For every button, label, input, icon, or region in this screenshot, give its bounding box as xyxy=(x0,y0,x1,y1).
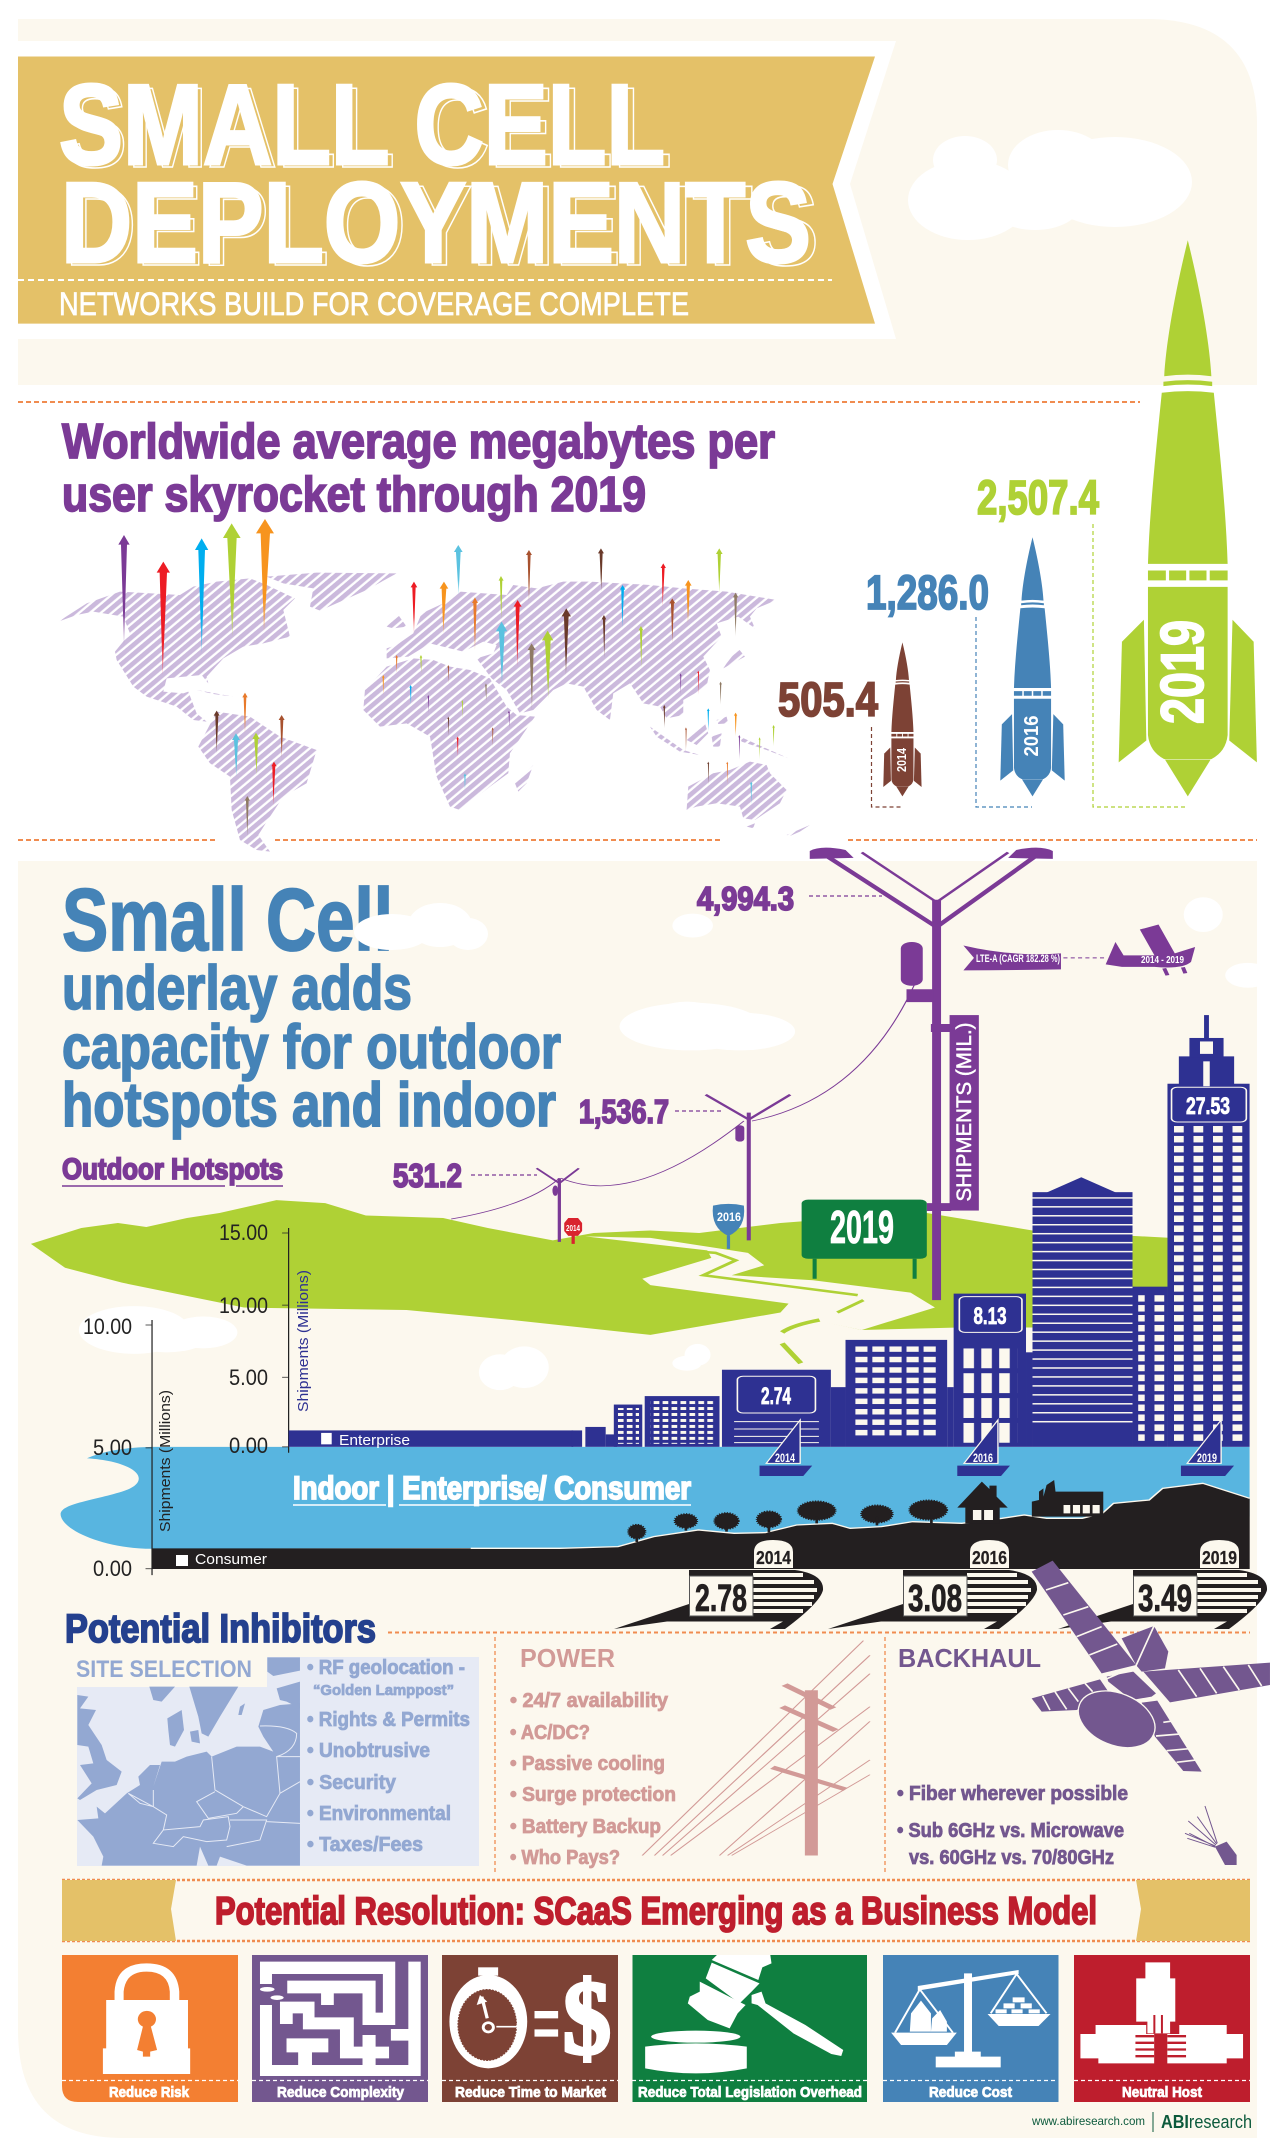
axis labels consumer: 10.00 xyxy=(83,1314,132,1339)
sign text 2016: 2016 xyxy=(717,1210,741,1224)
icon: stopwatch equals dollar xyxy=(449,1967,558,2068)
dollar sign: $ xyxy=(563,1959,611,2076)
street lamp small xyxy=(537,1168,579,1242)
footer: www.abiresearch.com xyxy=(1031,2114,1145,2128)
icon: maze xyxy=(260,1962,421,2076)
heading: potential inhibitors: Potential Inhibitors xyxy=(65,1607,376,1651)
power bullets: • Battery Backup xyxy=(510,1816,661,1838)
axis title consumer: Shipments (Millions) xyxy=(157,1390,174,1532)
site selection bullets: “Golden Lamppost” xyxy=(313,1682,454,1699)
building labels text: 8.13 xyxy=(974,1303,1006,1330)
fiber optic icon xyxy=(1185,1806,1237,1865)
axis labels enterprise: 0.00 xyxy=(229,1433,268,1458)
axis labels consumer xyxy=(83,1314,132,1581)
arrows xyxy=(118,519,775,837)
site selection title: SITE SELECTION xyxy=(76,1656,252,1683)
backhaul bullets: • Sub 6GHz vs. Microwave xyxy=(897,1820,1124,1842)
boat years xyxy=(775,1451,1217,1465)
heading: worldwide megabytes: Worldwide average megabytes per xyxy=(62,415,775,469)
map of Europe xyxy=(77,1657,300,1866)
value 505.4: 505.4 xyxy=(778,674,878,727)
card: reduce risk xyxy=(62,1955,238,2102)
railway marker 2019 xyxy=(1058,1540,1267,1629)
railway marker 2019: 2019 xyxy=(1202,1548,1237,1568)
sign text 2014: 2014 xyxy=(566,1224,580,1233)
site selection bullets: • Rights & Permits xyxy=(307,1709,470,1731)
value 1,536.7: 1,536.7 xyxy=(579,1093,669,1130)
text: small cell heading: Small Cell xyxy=(62,870,393,969)
icon: connector xyxy=(1080,1962,1243,2063)
axis title enterprise: Shipments (Millions) xyxy=(295,1270,312,1412)
title line 2: DEPLOYMENTS xyxy=(65,163,819,290)
outdoor hotspots label: Outdoor Hotspots xyxy=(62,1153,283,1186)
resolution banner xyxy=(62,1880,1250,1941)
footer: ABIresearch xyxy=(1161,2112,1252,2132)
building labels text xyxy=(761,1093,1230,1410)
text: small cell heading xyxy=(62,870,561,1140)
indoor water xyxy=(61,1447,1250,1549)
axis labels consumer: 5.00 xyxy=(93,1435,132,1460)
railway marker 2016: 3.08 xyxy=(908,1578,962,1620)
railway marker 2014: 2014 xyxy=(756,1548,791,1568)
backhaul bullets: vs. 60GHz vs. 70/80GHz xyxy=(909,1847,1114,1869)
enterprise marker xyxy=(321,1433,332,1444)
site selection bullets: • Environmental xyxy=(307,1803,451,1825)
axis labels enterprise xyxy=(219,1220,268,1458)
panel: power xyxy=(510,1641,870,1869)
card: neutral host: Neutral Host xyxy=(1122,2084,1202,2101)
lines on tower 2.74 xyxy=(734,1422,819,1443)
card: reduce total legislation overhead xyxy=(632,1955,867,2102)
power bullets: • AC/DC? xyxy=(510,1722,590,1744)
panel: backhaul xyxy=(897,1561,1270,1869)
text: small cell heading: hotspots and indoor xyxy=(62,1071,556,1140)
site selection bullets: • Taxes/Fees xyxy=(307,1834,423,1856)
backhaul title: BACKHAUL xyxy=(898,1643,1041,1673)
cables xyxy=(451,984,915,1219)
boat years: 2019 xyxy=(1197,1451,1217,1465)
shipments label on pole: SHIPMENTS (MIL.) xyxy=(953,1022,976,1202)
building labels text: 2.74 xyxy=(761,1383,791,1410)
indoor label: Indoor | Enterprise/ Consumer xyxy=(293,1470,691,1506)
enterprise bar xyxy=(289,1430,573,1447)
site selection bullets xyxy=(307,1657,470,1856)
footer xyxy=(1031,2112,1252,2132)
satellite icon xyxy=(1032,1561,1270,1772)
house xyxy=(957,1482,1008,1523)
railway marker 2014 xyxy=(614,1540,823,1629)
value 531.2: 531.2 xyxy=(393,1157,462,1194)
value 2,507.4: 2,507.4 xyxy=(977,472,1099,525)
rocket label 2014: 2014 xyxy=(894,747,909,772)
power bullets xyxy=(510,1690,676,1869)
railway marker 2016 xyxy=(828,1540,1037,1629)
green hills xyxy=(31,1200,1171,1335)
power bullets: • Who Pays? xyxy=(510,1847,620,1869)
rocket label 2019: 2019 xyxy=(1149,620,1216,724)
power title: POWER xyxy=(520,1643,615,1673)
text: small cell heading: underlay adds xyxy=(62,954,412,1023)
card: reduce cost xyxy=(883,1955,1058,2102)
power bullets: • Passive cooling xyxy=(510,1753,665,1775)
street lamp medium xyxy=(706,1095,790,1240)
railway marker 2016: 2016 xyxy=(972,1548,1007,1568)
axis charts xyxy=(146,1228,289,1575)
card: reduce total legislation overhead: Reduce Total Legislation Overhead xyxy=(638,2084,862,2101)
title line 2: DEPLOYMENTS xyxy=(61,160,811,287)
site selection bullets: • RF geolocation - xyxy=(307,1657,465,1679)
clouds xyxy=(79,897,1271,1390)
top cream background xyxy=(18,19,1257,385)
rocket 2014 xyxy=(883,642,922,796)
boat years: 2014 xyxy=(775,1451,795,1465)
railway marker 2014: 2.78 xyxy=(695,1578,747,1620)
title line 1: SMALL CELL xyxy=(63,65,672,192)
card: reduce time to market xyxy=(442,1955,618,2102)
consumer label: Consumer xyxy=(195,1551,267,1568)
icon: gavel xyxy=(645,1955,843,2073)
rocket label 2016: 2016 xyxy=(1021,716,1043,756)
building labels text: 27.53 xyxy=(1186,1093,1230,1120)
cloud near title xyxy=(908,130,1192,240)
site selection bullets: • Unobtrusive xyxy=(307,1740,430,1762)
icon: padlock xyxy=(103,1963,190,2074)
city skyline xyxy=(572,1015,1250,1447)
title banner xyxy=(18,41,896,339)
shore, boats, trees, house and factory xyxy=(152,1420,1250,1569)
backhaul bullets: • Fiber wherever possible xyxy=(897,1783,1128,1805)
axis labels enterprise: 15.00 xyxy=(219,1220,268,1245)
card: reduce complexity xyxy=(252,1955,428,2102)
card: reduce risk: Reduce Risk xyxy=(109,2084,190,2101)
value 4,994.3: 4,994.3 xyxy=(697,880,794,917)
value 1,286.0: 1,286.0 xyxy=(866,567,989,620)
banner text: LTE-A (CAGR 182.28 %) xyxy=(976,953,1060,965)
text: small cell heading: capacity for outdoor xyxy=(62,1013,561,1082)
lower cream background xyxy=(18,861,1257,2138)
railway marker 2019: 3.49 xyxy=(1138,1578,1192,1620)
cloud over heading xyxy=(354,903,488,950)
icon: scales xyxy=(891,1970,1051,2067)
utility pole icon xyxy=(642,1641,870,1855)
panel: site selection xyxy=(76,1656,479,1866)
plane text: 2014 - 2019 xyxy=(1141,955,1184,966)
river xyxy=(585,1236,935,1377)
axis labels enterprise: 10.00 xyxy=(219,1293,268,1318)
boat years: 2016 xyxy=(973,1451,993,1465)
axis labels enterprise: 5.00 xyxy=(229,1365,268,1390)
banner and plane xyxy=(963,925,1195,975)
road sign 2019 board xyxy=(802,1200,927,1279)
road sign 2014 stop xyxy=(564,1218,582,1244)
title line 1: SMALL CELL xyxy=(59,62,665,189)
trees xyxy=(628,1500,947,1539)
subtitle: NETWORKS BUILD FOR COVERAGE COMPLETE xyxy=(59,286,689,322)
rocket 2016 xyxy=(1000,537,1065,796)
sign text 2019: 2019 xyxy=(830,1201,894,1253)
power bullets: • 24/7 availability xyxy=(510,1690,669,1712)
street lamp large xyxy=(810,848,1053,1300)
card: reduce cost: Reduce Cost xyxy=(929,2084,1012,2101)
boats xyxy=(760,1420,1234,1476)
enterprise label: Enterprise xyxy=(339,1432,410,1449)
road sign 2016 shield xyxy=(713,1204,744,1249)
rocket 2019 xyxy=(1119,240,1257,796)
backhaul bullets xyxy=(897,1783,1128,1869)
site selection bullets: • Security xyxy=(307,1772,397,1794)
scene: hills, river and lamps xyxy=(31,848,1271,1575)
card: reduce complexity: Reduce Complexity xyxy=(277,2084,405,2101)
heading: worldwide megabytes xyxy=(62,415,775,522)
axis labels consumer: 0.00 xyxy=(93,1556,132,1581)
factory xyxy=(1032,1480,1103,1517)
card: reduce time to market: Reduce Time to Market xyxy=(455,2084,606,2101)
power bullets: • Surge protection xyxy=(510,1784,676,1806)
building value labels xyxy=(737,1087,1246,1413)
card: neutral host xyxy=(1074,1955,1250,2102)
heading: worldwide megabytes: user skyrocket through 2019 xyxy=(62,468,646,522)
consumer marker xyxy=(176,1555,188,1566)
world map with arrows xyxy=(58,519,810,852)
